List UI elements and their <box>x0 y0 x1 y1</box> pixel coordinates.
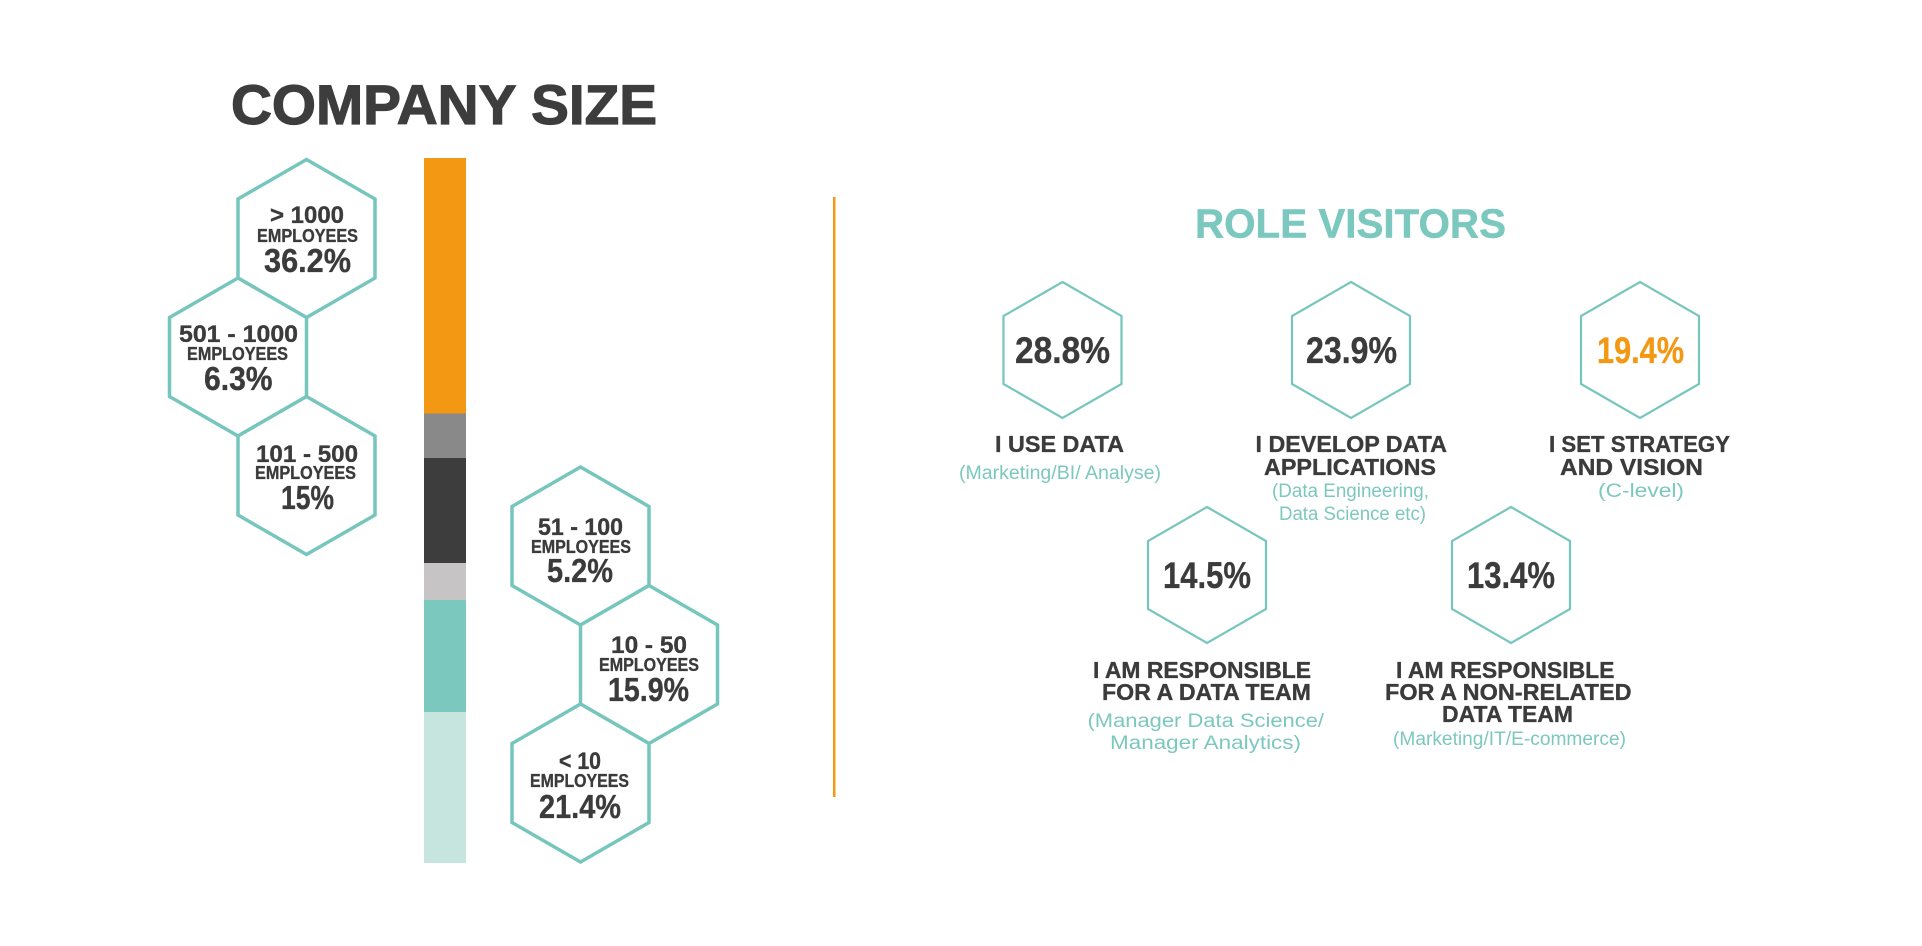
hexagon: fewer than 10 employees: EMPLOYEES <box>530 771 629 791</box>
hexagon: more than 1000 employees: > 1000 <box>270 202 344 229</box>
role: I am responsible for a data team <box>1088 507 1325 754</box>
role: I am responsible for a non-related data team: (Marketing/IT/E-commerce) <box>1393 729 1626 750</box>
role: I set strategy and vision <box>1549 282 1730 502</box>
hexagon: 101 to 500 employees <box>238 396 375 554</box>
hexagon: more than 1000 employees: EMPLOYEES <box>257 226 358 246</box>
role: I use data: I USE DATA <box>995 431 1124 457</box>
role: I develop data applications: I DEVELOP DATA <box>1256 431 1447 457</box>
hexagon: 101 to 500 employees: 101 - 500 <box>256 441 358 468</box>
hexagon: 101 to 500 employees: 15% <box>281 479 334 516</box>
hexagon: 51 to 100 employees: EMPLOYEES <box>531 537 631 557</box>
role: I am responsible for a data team: Manager Analytics) <box>1110 733 1301 754</box>
hexagon: 501 to 1000 employees: 6.3% <box>204 360 272 397</box>
hexagon: fewer than 10 employees: < 10 <box>559 748 601 775</box>
role: I develop data applications: (Data Engineering, <box>1272 481 1429 502</box>
role: I am responsible for a data team: (Manager Data Science/ <box>1088 711 1325 732</box>
role: I use data <box>959 282 1161 484</box>
hexagon: 10 to 50 employees: 10 - 50 <box>611 632 687 659</box>
hexagon: 10 to 50 employees: 15.9% <box>608 671 689 708</box>
role: I am responsible for a non-related data team <box>1385 507 1632 750</box>
role: I am responsible for a non-related data team: 13.4% <box>1467 555 1555 596</box>
role: I set strategy and vision: (C-level) <box>1598 481 1684 502</box>
hexagon: more than 1000 employees <box>238 160 375 318</box>
role: I set strategy and vision: 19.4% <box>1597 330 1684 371</box>
role: I am responsible for a data team: I AM RESPONSIBLE <box>1093 657 1311 683</box>
role: I develop data applications: 23.9% <box>1306 330 1397 371</box>
stacked bar chart <box>424 158 466 863</box>
title: company size: COMPANY SIZE <box>231 73 657 136</box>
role: I am responsible for a non-related data team: FOR A NON-RELATED <box>1385 679 1632 705</box>
hexagon: fewer than 10 employees <box>512 704 649 862</box>
hexagon: 51 to 100 employees <box>512 467 649 625</box>
hexagon: more than 1000 employees: 36.2% <box>264 242 351 279</box>
role: I develop data applications: APPLICATIONS <box>1264 454 1436 480</box>
hexagon: 51 to 100 employees: 5.2% <box>547 552 613 589</box>
hexagon: 10 to 50 employees <box>580 586 718 744</box>
title: role visitors: ROLE VISITORS <box>1195 200 1506 246</box>
role: I am responsible for a data team: FOR A DATA TEAM <box>1102 679 1311 705</box>
hexagon: 501 to 1000 employees: EMPLOYEES <box>187 344 288 364</box>
role: I am responsible for a non-related data team: DATA TEAM <box>1442 701 1573 727</box>
vertical divider <box>833 197 836 797</box>
role: I develop data applications <box>1256 282 1447 525</box>
panel: company size <box>170 73 718 863</box>
panel: role visitors <box>959 200 1730 754</box>
role: I set strategy and vision: AND VISION <box>1560 454 1703 480</box>
role: I use data: 28.8% <box>1015 330 1110 371</box>
hexagon: 501 to 1000 employees <box>170 278 306 436</box>
hexagon: 101 to 500 employees: EMPLOYEES <box>255 463 356 483</box>
role: I use data: (Marketing/BI/ Analyse) <box>959 463 1161 484</box>
role: I develop data applications: Data Science etc) <box>1279 504 1426 525</box>
role: I am responsible for a non-related data team: I AM RESPONSIBLE <box>1396 657 1614 683</box>
hexagon: fewer than 10 employees: 21.4% <box>539 788 621 825</box>
role: I set strategy and vision: I SET STRATEGY <box>1549 431 1730 457</box>
hexagon: 501 to 1000 employees: 501 - 1000 <box>179 321 298 348</box>
role: I am responsible for a data team: 14.5% <box>1163 555 1251 596</box>
hexagon: 51 to 100 employees: 51 - 100 <box>538 514 623 541</box>
hexagon: 10 to 50 employees: EMPLOYEES <box>599 655 699 675</box>
